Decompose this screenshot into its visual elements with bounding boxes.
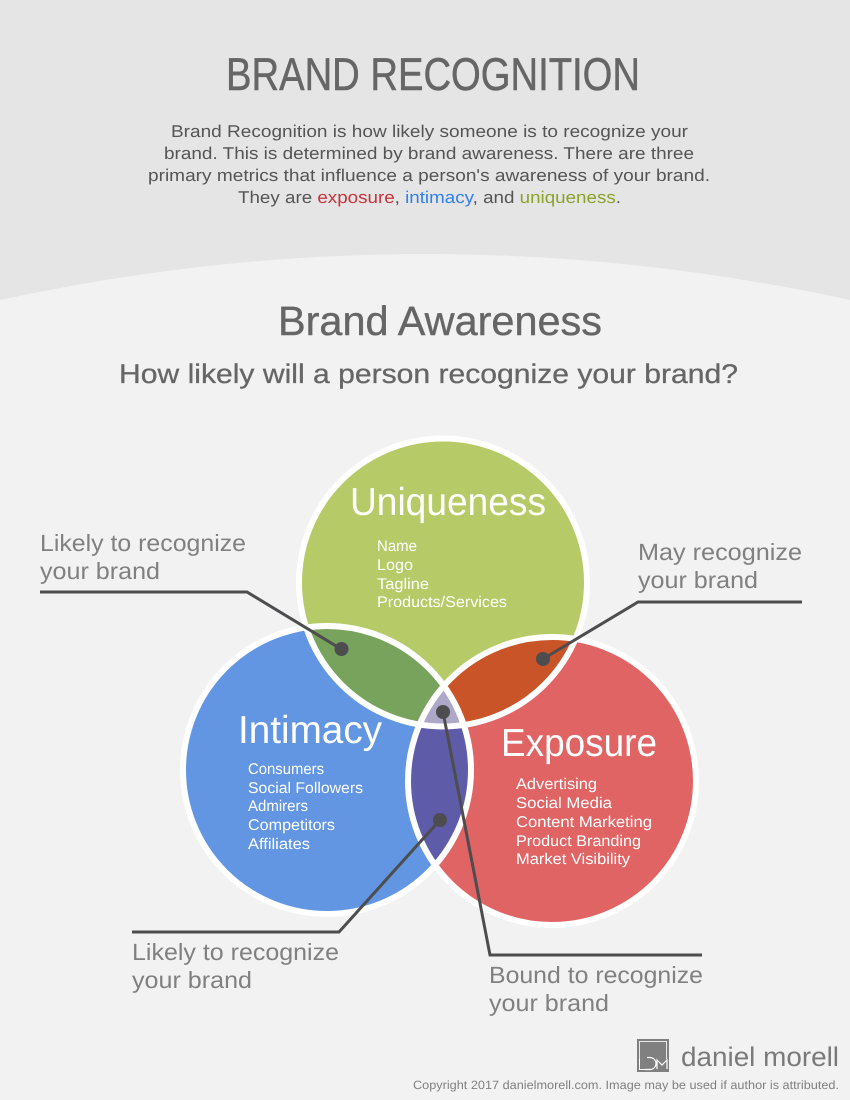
uniqueness label and list: Tagline [377,576,429,593]
venn diagram [183,438,696,925]
intimacy label and list: Competitors [248,817,335,834]
leader line: top left [40,592,348,656]
intimacy label and list: Affiliates [248,836,310,853]
circle outlines [183,438,696,925]
uniqueness label and list: Logo [377,557,413,574]
intimacy label and list: Intimacy [238,709,382,752]
callout: top right: May recognize [638,539,802,565]
header band with curved edge [0,0,850,300]
overlap: uniqueness and exposure [448,640,570,722]
heading: Brand Awareness: Brand Awareness [278,298,602,344]
callout: top right [638,539,802,593]
leader line: lower left [132,813,447,932]
subheading question: How likely will a person recognize your brand? [119,359,738,389]
callout: top left: your brand [40,558,160,584]
exposure label and list: Advertising [516,776,597,793]
uniqueness label and list [350,481,546,611]
callout: lower left: Likely to recognize [132,939,339,965]
callout: top left [40,530,246,584]
overlap: all three [424,690,460,724]
intro text block: brand. This is determined by brand awareness. There are three [164,144,694,163]
exposure label and list: Social Media [516,795,612,812]
circle: exposure [408,637,696,925]
exposure label and list: Market Visibility [516,851,630,868]
callout: top left: Likely to recognize [40,530,246,556]
leader line: top right [536,602,802,666]
title: BRAND RECOGNITION [226,48,640,100]
logo wordmark: daniel morell [681,1042,839,1072]
callout: bottom center [489,962,703,1016]
intimacy label and list: Admirers [248,798,308,815]
overlap: uniqueness and intimacy [311,629,440,722]
uniqueness label and list: Products/Services [377,594,507,611]
exposure label and list: Content Marketing [516,814,652,831]
leader line: center bottom [436,705,702,955]
circle: intimacy [183,626,471,914]
intro text block [148,122,710,207]
intimacy label and list [238,709,382,853]
intimacy label and list: Consumers [248,761,324,778]
callout: bottom center: Bound to recognize [489,962,703,988]
intro text block: Brand Recognition is how likely someone is to recognize your [171,122,688,141]
logo mark [637,1039,669,1072]
exposure label and list [501,722,657,868]
callout: lower left [132,939,339,993]
intro text block: They are exposure , intimacy , and uniqueness . [238,188,621,207]
uniqueness label and list: Name [377,538,417,555]
copyright line: Copyright 2017 danielmorell.com. Image may be used if author is attributed. [413,1078,839,1092]
overlap: intimacy and exposure [411,728,468,860]
callout: bottom center: your brand [489,990,609,1016]
circle: uniqueness [299,438,587,726]
exposure label and list: Exposure [501,722,657,765]
uniqueness label and list: Uniqueness [350,481,546,524]
callout: lower left: your brand [132,967,252,993]
exposure label and list: Product Branding [516,833,641,850]
intimacy label and list: Social Followers [248,780,363,797]
callout: top right: your brand [638,567,758,593]
intro text block: primary metrics that influence a person's awareness of your brand. [148,166,710,185]
